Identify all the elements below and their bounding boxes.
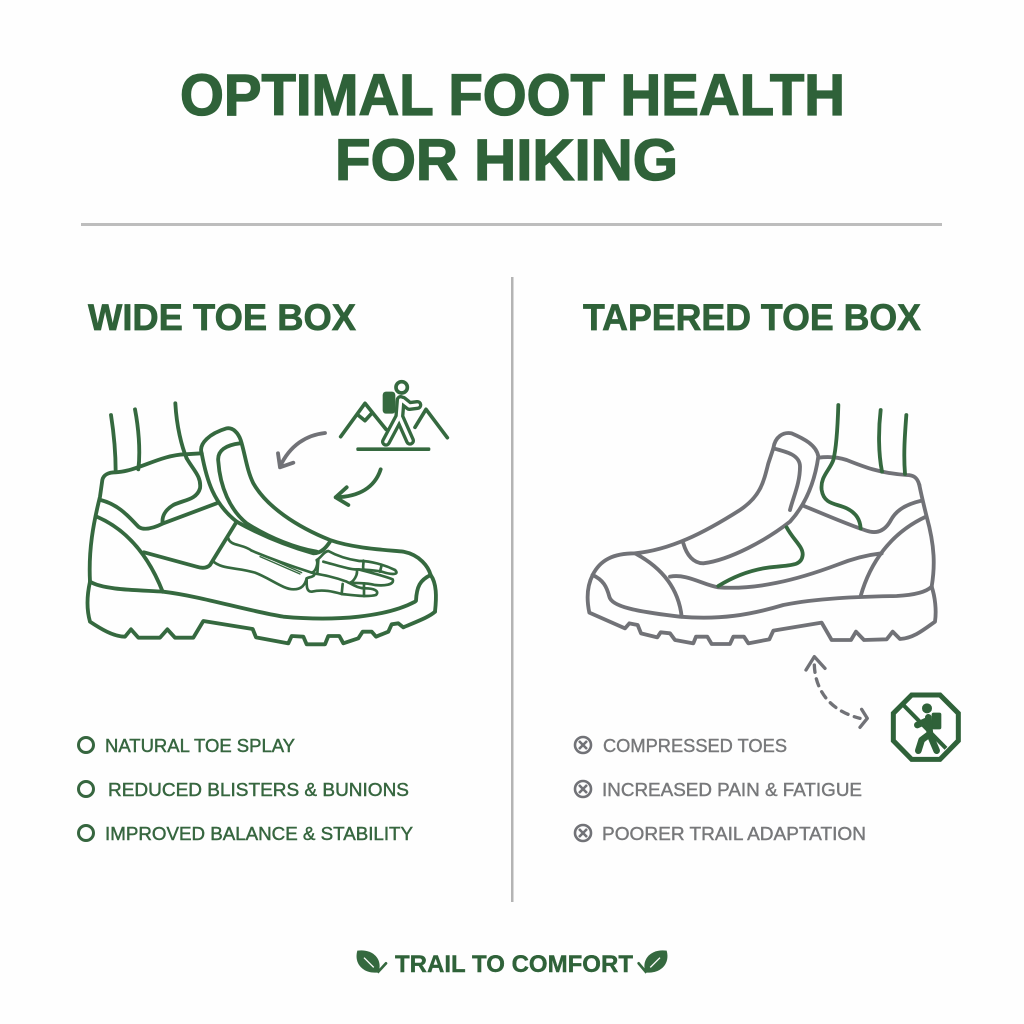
title [180,63,845,193]
list: wide toe box benefits: REDUCED BLISTERS & BUNIONS [108,779,409,800]
title: FOR HIKING [335,128,678,193]
heading: wide toe box: WIDE TOE BOX [88,297,356,338]
panel: wide toe box [78,297,447,844]
icon: grey curved arrow [278,433,325,467]
list: tapered toe box drawbacks: COMPRESSED TOES [603,735,787,756]
panel: tapered toe box [575,297,958,844]
icon: foot bones [213,538,396,596]
icon: green curved arrow [336,469,381,505]
list: tapered toe box drawbacks [575,735,866,844]
list: wide toe box benefits [78,735,413,844]
illustration: wide toe boot [87,403,436,644]
icon: left leaf [357,950,386,973]
list: wide toe box benefits: NATURAL TOE SPLAY [105,735,295,756]
icon: right leaf [639,950,667,973]
list: tapered toe box drawbacks: INCREASED PAIN & FATIGUE [602,779,862,800]
title: OPTIMAL FOOT HEALTH [180,63,845,128]
list: tapered toe box drawbacks: POORER TRAIL ADAPTATION [602,823,866,844]
footer: trail to comfort: TRAIL TO COMFORT [395,951,633,978]
icon: dashed double arrow [806,657,867,727]
heading: tapered toe box: TAPERED TOE BOX [583,297,921,338]
icon: no hiking sign [893,695,958,759]
illustration: tapered toe boot [588,405,936,644]
list: wide toe box benefits: IMPROVED BALANCE & STABILITY [105,823,413,844]
icon: hiker with mountains [341,382,447,451]
